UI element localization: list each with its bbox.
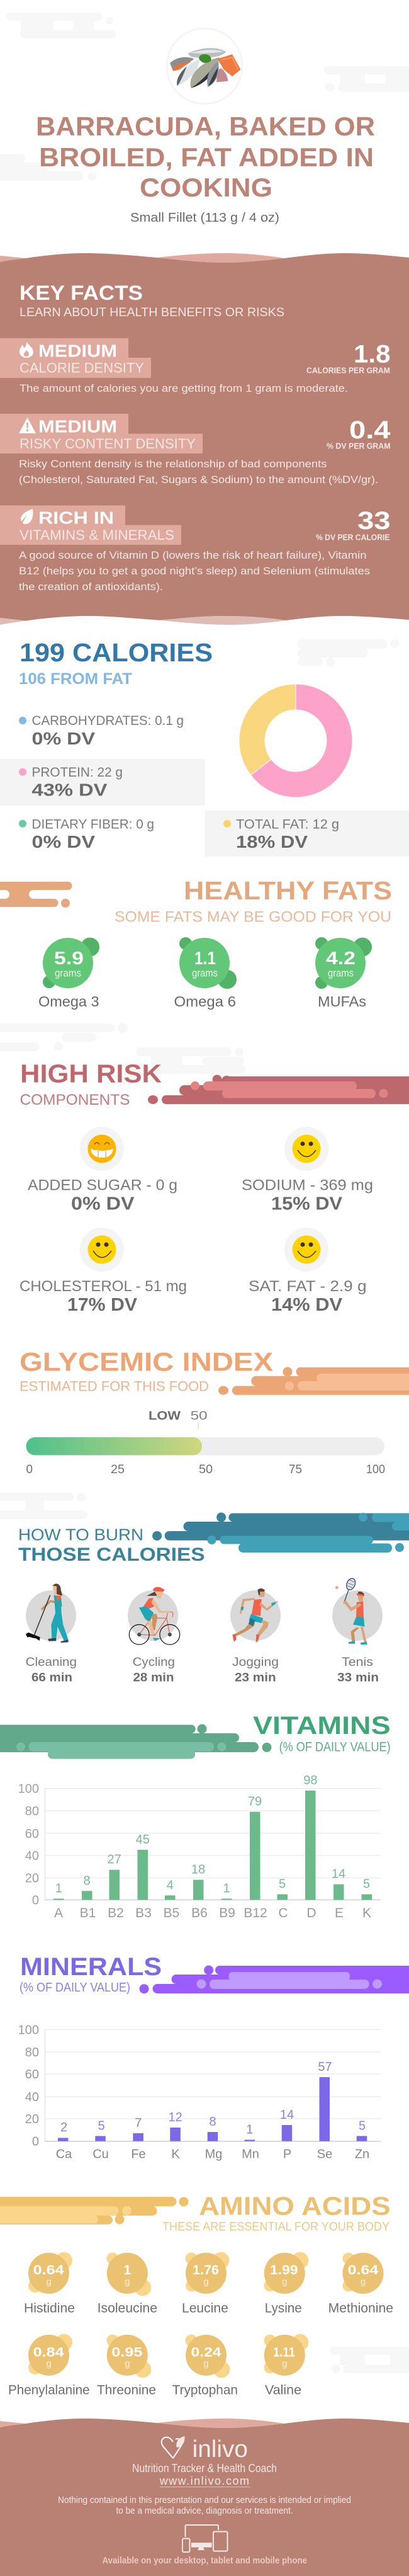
- heading: THOSE CALORIES: [18, 1544, 205, 1565]
- fact: risky content density: 0.4: [349, 416, 391, 444]
- subheading: LEARN ABOUT HEALTH BENEFITS OR RISKS: [20, 305, 284, 319]
- risk: cholesterol: CHOLESTEROL - 51 mg: [20, 1278, 187, 1295]
- y axis: 80: [25, 1804, 39, 1818]
- gauge value: LOW: [148, 1410, 181, 1423]
- amino: tryptophan: 0.24: [191, 2345, 221, 2359]
- decorative band: [0, 882, 72, 908]
- y axis: 60: [25, 2068, 39, 2082]
- title: BROILED, FAT ADDED IN: [39, 142, 374, 172]
- fact: risky content density: RISKY CONTENT DENSITY: [20, 436, 196, 452]
- background cloud left of title: [0, 154, 97, 181]
- x axis labels: B1: [80, 1906, 96, 1920]
- risk: added sugar: 0% DV: [71, 1194, 135, 1214]
- fact: vitamins and minerals: A good source of Vitamin D (lowers the risk of heart failure), Vitamin: [19, 549, 366, 561]
- fact: vitamins and minerals: % DV PER CALORIE: [316, 533, 390, 542]
- amino: isoleucine: Isoleucine: [98, 2301, 157, 2315]
- wave background: [0, 2419, 409, 2576]
- amino: phenylalanine: [8, 2334, 90, 2397]
- icon: leaf: [21, 509, 33, 524]
- amino: threonine: 0.95: [111, 2345, 143, 2359]
- fat: omega 6: 1.1: [194, 949, 216, 969]
- x axis labels: B6: [191, 1906, 208, 1920]
- fact: vitamins and minerals: the creation of antioxidants).: [19, 581, 163, 593]
- fact: vitamins and minerals: 33: [357, 507, 390, 535]
- amino: histidine: Histidine: [24, 2301, 75, 2315]
- subheading: THESE ARE ESSENTIAL FOR YOUR BODY: [162, 2221, 389, 2234]
- panel: minerals: [18, 1953, 409, 2162]
- risk: saturated fat: [249, 1228, 366, 1315]
- decorative band: [152, 1513, 409, 1553]
- value labels: 1: [223, 1882, 230, 1896]
- gauge scale: 100: [366, 1463, 385, 1476]
- macro: carbohydrates: [19, 714, 184, 748]
- panel: key facts: [0, 253, 409, 625]
- icon: person jogging: [232, 1588, 279, 1643]
- fat: mufas: MUFAs: [318, 993, 366, 1010]
- fat: mufas: grams: [328, 967, 354, 979]
- amino: lysine: [264, 2252, 308, 2315]
- bar chart: minerals: [18, 2023, 381, 2162]
- amino: phenylalanine: 0.84: [33, 2345, 64, 2359]
- icon: inlivo heart logo: [162, 2436, 185, 2458]
- amino: histidine: [24, 2252, 75, 2315]
- disclaimer: Nothing contained in this presentation and our services is intended or implied: [58, 2495, 351, 2505]
- fact: vitamins and minerals: B12 (helps you to get a good night’s sleep) and Selenium (stimulates: [19, 565, 370, 577]
- activity: tennis: Tenis: [342, 1656, 373, 1669]
- activity: tennis: 33 min: [337, 1672, 379, 1685]
- bar chart: vitamins: [18, 1774, 381, 1920]
- x axis labels: B5: [164, 1906, 179, 1920]
- amino: leucine: g: [203, 2277, 209, 2288]
- panel: high risk components: [0, 1023, 409, 1315]
- fact: risky content density: (Cholesterol, Saturated Fat, Sugars & Sodium) to the amount (%DV/gr).: [19, 474, 378, 486]
- amino: valine: g: [282, 2359, 287, 2369]
- title: [36, 111, 375, 202]
- heading: HEALTHY FATS: [184, 876, 392, 905]
- icon: flame: [20, 341, 33, 358]
- amino: phenylalanine: Phenylalanine: [8, 2383, 90, 2397]
- x axis labels: K: [362, 1906, 371, 1920]
- x axis labels: B2: [108, 1906, 124, 1920]
- gauge scale: [26, 1463, 385, 1476]
- fat: omega 6: Omega 6: [174, 993, 236, 1010]
- heading: GLYCEMIC INDEX: [20, 1347, 273, 1377]
- y axis: 60: [25, 1827, 39, 1841]
- amino: leucine: 1.76: [193, 2263, 219, 2277]
- value labels: 57: [318, 2060, 332, 2074]
- y axis: 100: [18, 2023, 39, 2037]
- macro: protein: [19, 765, 123, 800]
- value labels: 8: [209, 2115, 216, 2129]
- y axis: 0: [32, 2135, 39, 2149]
- x axis labels: [54, 1906, 371, 1920]
- fat: mufas: 4.2: [326, 949, 356, 969]
- x axis labels: K: [171, 2148, 180, 2162]
- decorative band: [148, 1074, 409, 1104]
- macro: protein: 43% DV: [31, 780, 108, 800]
- background cloud: [0, 1493, 87, 1519]
- background cloud top left: [6, 13, 116, 38]
- macro: total fat: 18% DV: [236, 832, 308, 852]
- title: BARRACUDA, BAKED OR: [36, 111, 375, 141]
- x axis labels: Fe: [131, 2148, 146, 2162]
- subheading: (% OF DAILY VALUE): [20, 1981, 130, 1995]
- gauge bar: [26, 1437, 384, 1455]
- background cloud top right: [324, 66, 409, 92]
- availability note: Available on your desktop, tablet and mobile phone: [102, 2555, 307, 2566]
- icon: smiling face: [292, 1135, 321, 1163]
- amino: methionine: Methionine: [328, 2301, 393, 2315]
- activity: cycling: Cycling: [133, 1656, 175, 1669]
- x axis labels: D: [306, 1906, 317, 1920]
- heading: KEY FACTS: [20, 282, 143, 304]
- icon: person sweeping: [26, 1583, 69, 1643]
- risk: added sugar: ADDED SUGAR - 0 g: [28, 1177, 177, 1194]
- icon: smiling face: [292, 1236, 321, 1263]
- amino: valine: Valine: [265, 2383, 301, 2397]
- fact: risky content density: Risky Content density is the relationship of bad components: [19, 458, 327, 470]
- fat: omega 3: [38, 938, 99, 1010]
- icon: warning triangle: [19, 418, 36, 433]
- amino: threonine: Threonine: [97, 2383, 156, 2397]
- amino: valine: [264, 2334, 308, 2397]
- amino: threonine: [97, 2334, 156, 2397]
- fat: omega 6: grams: [192, 967, 218, 979]
- value labels: 18: [191, 1863, 205, 1877]
- value labels: 98: [303, 1774, 318, 1787]
- fact: calorie density: The amount of calories you are getting from 1 gram is moderate.: [20, 382, 348, 394]
- gauge scale: 75: [289, 1463, 302, 1476]
- risk: added sugar: [28, 1127, 177, 1214]
- decorative band: [0, 2197, 189, 2225]
- panel: amino acids: [0, 2192, 409, 2397]
- heading: HOW TO BURN: [18, 1525, 143, 1544]
- amino: tryptophan: g: [203, 2359, 209, 2369]
- gauge scale: 50: [199, 1463, 213, 1476]
- value labels: 2: [60, 2121, 67, 2134]
- fact: vitamins and minerals: RICH IN: [38, 508, 114, 528]
- heading: VITAMINS: [253, 1712, 391, 1740]
- y axis: 20: [25, 2112, 39, 2126]
- fat: omega 3: Omega 3: [38, 993, 99, 1010]
- value labels: 7: [135, 2116, 142, 2130]
- value labels: 14: [280, 2108, 294, 2122]
- food photo circle: [167, 28, 242, 104]
- x axis labels: Cu: [92, 2148, 109, 2162]
- fact: calorie density: CALORIES PER GRAM: [306, 365, 390, 375]
- panel: footer: [0, 2419, 409, 2576]
- risk: sodium: SODIUM - 369 mg: [242, 1177, 373, 1194]
- subheading: SOME FATS MAY BE GOOD FOR YOU: [115, 909, 391, 926]
- value labels: 8: [83, 1874, 91, 1888]
- amino: phenylalanine: g: [46, 2359, 52, 2369]
- x axis labels: C: [278, 1906, 288, 1920]
- value labels: 14: [332, 1867, 345, 1881]
- value labels: 5: [279, 1878, 286, 1891]
- amino: histidine: 0.64: [33, 2263, 64, 2277]
- x axis labels: P: [283, 2148, 291, 2162]
- y axis: 40: [25, 2090, 39, 2104]
- grid lines: [45, 1788, 381, 1900]
- x axis labels: Ca: [56, 2148, 72, 2162]
- risk: cholesterol: 17% DV: [67, 1295, 138, 1315]
- heading: AMINO ACIDS: [199, 2192, 391, 2221]
- activity: tennis: [332, 1577, 383, 1685]
- brand name: inlivo: [193, 2436, 248, 2463]
- icon: person playing tennis: [335, 1577, 367, 1644]
- value labels: 12: [168, 2111, 182, 2124]
- panel: calories: [0, 638, 409, 857]
- y axis: 80: [25, 2046, 39, 2060]
- background cloud: [330, 2347, 409, 2373]
- amino: leucine: [182, 2252, 229, 2315]
- website link: www.inlivo.com: [159, 2475, 249, 2487]
- y axis: 20: [25, 1872, 39, 1886]
- row highlights: [0, 759, 409, 857]
- value labels: 27: [107, 1853, 121, 1867]
- panel: how to burn calories: [0, 1493, 409, 1685]
- gauge value: [148, 1410, 208, 1430]
- heading: MINERALS: [20, 1953, 162, 1981]
- title: COOKING: [140, 173, 272, 202]
- amino: leucine: Leucine: [182, 2301, 228, 2315]
- value labels: 5: [363, 1878, 370, 1891]
- value labels: 4: [167, 1878, 174, 1892]
- macro: total fat: [223, 818, 339, 852]
- macro: carbohydrates: 0% DV: [31, 729, 95, 748]
- amino: isoleucine: g: [125, 2277, 130, 2288]
- gauge scale: 25: [111, 1463, 125, 1476]
- heading: HIGH RISK: [20, 1059, 162, 1088]
- disclaimer: [58, 2495, 351, 2516]
- x axis labels: E: [335, 1906, 344, 1920]
- macro: dietary fiber: 0% DV: [31, 832, 95, 852]
- fact: calorie density: CALORIE DENSITY: [20, 360, 144, 375]
- activity: cleaning: [26, 1583, 77, 1685]
- activity: jogging: [230, 1588, 281, 1685]
- amino: tryptophan: Tryptophan: [172, 2383, 238, 2397]
- amino: tryptophan: [172, 2334, 238, 2397]
- amino: isoleucine: 1: [123, 2263, 131, 2277]
- heading: [18, 1525, 205, 1565]
- x axis labels: Se: [317, 2148, 332, 2162]
- x axis labels: B9: [219, 1906, 235, 1920]
- panel: vitamins: [0, 1712, 391, 1920]
- subheading: (% OF DAILY VALUE): [279, 1740, 391, 1755]
- x axis labels: Zn: [355, 2148, 369, 2162]
- decorative band: [218, 1367, 409, 1395]
- activity: cycling: [128, 1587, 180, 1685]
- disclaimer: to be a medical advice, diagnosis or treatment.: [116, 2506, 293, 2516]
- macro: carbohydrates: CARBOHYDRATES: 0.1 g: [31, 714, 184, 728]
- risk: sodium: 15% DV: [271, 1194, 343, 1214]
- panel: healthy fats: [0, 876, 392, 1010]
- serving size: Small Fillet (113 g / 4 oz): [130, 211, 279, 225]
- y axis: 100: [18, 1782, 39, 1796]
- macro: dietary fiber: [19, 818, 154, 852]
- macro: dietary fiber: DIETARY FIBER: 0 g: [31, 818, 154, 831]
- fact: calorie density: MEDIUM: [38, 341, 117, 360]
- amino: lysine: Lysine: [265, 2301, 302, 2315]
- icon: person cycling: [129, 1587, 180, 1644]
- value labels: 45: [136, 1833, 150, 1847]
- icon: smiling face: [88, 1236, 116, 1263]
- fact: vitamins and minerals: VITAMINS & MINERALS: [20, 527, 174, 543]
- y axis: [18, 2023, 39, 2149]
- gauge value: 50: [191, 1410, 208, 1423]
- fact: risky content density: MEDIUM: [38, 417, 117, 436]
- amino: methionine: 0.64: [348, 2263, 379, 2277]
- fact: risky content density: [0, 414, 391, 486]
- value labels: [55, 1774, 370, 1896]
- background clouds: [0, 1023, 245, 1074]
- icon: grinning face: [88, 1135, 116, 1163]
- subheading: 106 FROM FAT: [19, 670, 132, 688]
- icon: devices: [182, 2525, 228, 2552]
- donut chart: [239, 684, 352, 797]
- value labels: [60, 2060, 366, 2136]
- macro: total fat: TOTAL FAT: 12 g: [236, 818, 339, 831]
- amino: histidine: g: [46, 2277, 52, 2288]
- value labels: 1: [55, 1882, 62, 1896]
- tagline: Nutrition Tracker & Health Coach: [132, 2462, 277, 2475]
- fact: risky content density: % DV PER GRAM: [327, 441, 390, 451]
- risk: cholesterol: [20, 1228, 187, 1315]
- decorative band: [0, 1724, 272, 1759]
- activity: jogging: Jogging: [232, 1656, 279, 1669]
- x axis labels: [56, 2148, 369, 2162]
- panel: glycemic index: [20, 1347, 409, 1476]
- risk: sodium: [242, 1127, 373, 1214]
- gauge scale: 0: [26, 1463, 33, 1476]
- risk: saturated fat: SAT. FAT - 2.9 g: [249, 1278, 366, 1295]
- heading: 199 CALORIES: [20, 638, 213, 667]
- fat: omega 3: grams: [55, 967, 81, 979]
- value labels: 5: [98, 2119, 105, 2133]
- fat: omega 6: [174, 937, 237, 1010]
- fat: mufas: [315, 937, 372, 1010]
- amino: methionine: [328, 2252, 393, 2315]
- fat: omega 3: 5.9: [54, 949, 84, 969]
- fact: calorie density: 1.8: [354, 340, 390, 368]
- bars: [58, 2077, 367, 2141]
- y axis: 0: [32, 1893, 39, 1907]
- wave background: [0, 253, 409, 625]
- x axis labels: Mg: [205, 2148, 222, 2162]
- amino: isoleucine: [98, 2252, 157, 2315]
- macro: protein: PROTEIN: 22 g: [31, 765, 123, 780]
- activity: cleaning: 66 min: [31, 1672, 72, 1685]
- subheading: ESTIMATED FOR THIS FOOD: [20, 1379, 209, 1394]
- icon: fish assortment: [170, 48, 240, 88]
- x axis labels: B3: [135, 1906, 152, 1920]
- subheading: COMPONENTS: [20, 1091, 130, 1108]
- risk: saturated fat: 14% DV: [271, 1295, 343, 1315]
- amino: lysine: g: [282, 2277, 287, 2288]
- fact: calorie density: [0, 338, 390, 394]
- grid lines: [45, 2029, 381, 2141]
- background cloud: [298, 639, 399, 666]
- amino: valine: 1.11: [273, 2345, 295, 2359]
- fact: vitamins and minerals: [0, 505, 390, 593]
- activity: jogging: 23 min: [235, 1672, 276, 1685]
- decorative band: [140, 1965, 409, 1993]
- value labels: 79: [248, 1795, 262, 1809]
- x axis labels: Mn: [242, 2148, 259, 2162]
- value labels: 5: [359, 2119, 366, 2133]
- amino: lysine: 1.99: [270, 2263, 298, 2277]
- y axis: 40: [25, 1849, 39, 1863]
- value labels: 1: [246, 2123, 253, 2136]
- bars: [53, 1791, 372, 1900]
- x axis labels: A: [54, 1906, 63, 1920]
- y axis: [18, 1782, 39, 1907]
- x axis labels: B12: [244, 1906, 267, 1920]
- amino: threonine: g: [125, 2359, 130, 2369]
- amino: methionine: g: [361, 2277, 366, 2288]
- activity: cycling: 28 min: [133, 1672, 174, 1685]
- activity: cleaning: Cleaning: [26, 1656, 77, 1669]
